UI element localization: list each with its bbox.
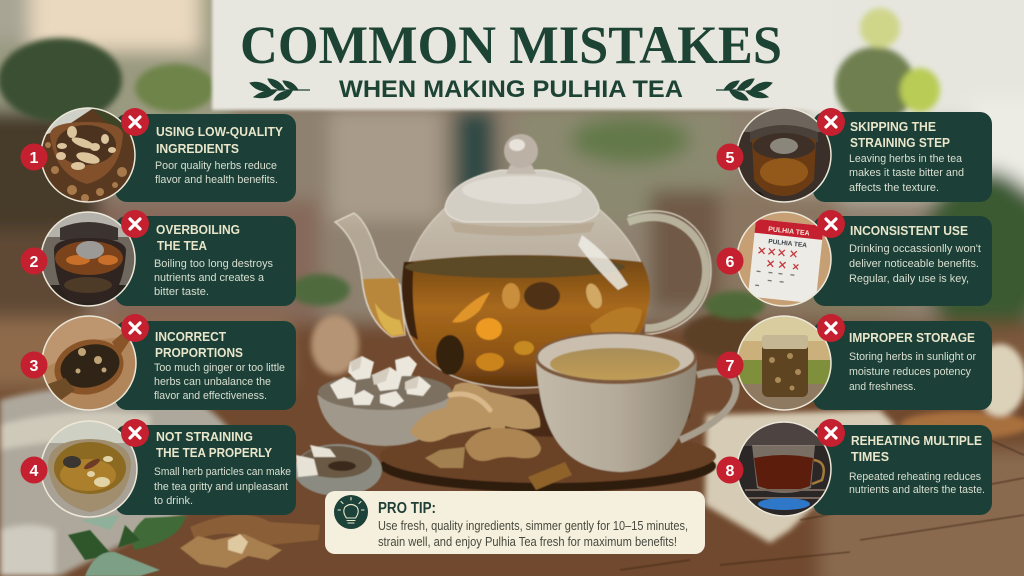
number 5 bbox=[716, 144, 744, 170]
teapot glass body bbox=[403, 208, 648, 388]
panel 5 bbox=[813, 112, 992, 202]
photo border bbox=[41, 108, 135, 202]
panel 8 bbox=[813, 425, 992, 515]
photo: glass cup of tea on a gas flame bbox=[737, 422, 831, 516]
panel 7: moisture reduces potency bbox=[849, 366, 972, 378]
pro tip body: strain well, and enjoy Pulhia Tea fresh for maximum benefits! bbox=[378, 535, 677, 549]
mistake 7: improper storage bbox=[716, 314, 992, 410]
X badge bbox=[121, 108, 149, 136]
tea liquid bbox=[402, 255, 650, 387]
X badge bbox=[121, 419, 149, 447]
panel 4: THE TEA PROPERLY bbox=[156, 445, 272, 460]
pro tip heading: PRO TIP: bbox=[378, 500, 436, 517]
panel 5: SKIPPING THE bbox=[850, 119, 936, 134]
bottom herbs and leaves bbox=[68, 515, 320, 576]
subtitle: WHEN MAKING PULHIA TEA bbox=[339, 76, 683, 103]
number 1 bbox=[20, 144, 48, 170]
number 6 bbox=[716, 248, 744, 274]
white lump bowl bbox=[317, 356, 452, 446]
panel 4 bbox=[115, 425, 296, 515]
photo: marked calendar: PULHIA TEA bbox=[768, 238, 808, 249]
number 3: 3 bbox=[30, 358, 39, 375]
X badge bbox=[817, 108, 845, 136]
pro tip body bbox=[378, 519, 688, 549]
panel 1 bbox=[115, 114, 296, 202]
panel 4: the tea gritty and unpleasant bbox=[154, 481, 288, 493]
panel 8: REHEATING MULTIPLE bbox=[851, 433, 982, 448]
photo: cup of tea with herb particles bbox=[47, 422, 136, 512]
panel 3: herbs can unbalance the bbox=[154, 376, 271, 388]
photo: marked calendar bbox=[737, 212, 831, 306]
number 7 bbox=[716, 352, 744, 378]
panel 4: Small herb particles can make bbox=[154, 466, 291, 478]
panel 4: to drink. bbox=[154, 495, 193, 507]
photo border bbox=[737, 108, 831, 202]
title backdrop band bbox=[212, 0, 832, 110]
number 8: 8 bbox=[726, 463, 735, 480]
teapot spout bbox=[335, 213, 405, 337]
photo: glass jar of herbs bbox=[737, 316, 831, 410]
number 2: 2 bbox=[30, 254, 39, 271]
photo: herbs in a wooden bowl bbox=[40, 107, 136, 203]
panel 2: OVERBOILING bbox=[156, 222, 240, 237]
panel 5: affects the texture. bbox=[849, 182, 939, 194]
photo: boiling pot bbox=[40, 211, 136, 307]
number 7: 7 bbox=[726, 358, 735, 375]
photo border bbox=[41, 421, 137, 517]
ginger root bbox=[410, 383, 572, 490]
panel 3: INCORRECT bbox=[155, 329, 226, 344]
panel 6: Drinking occassionlly won't bbox=[849, 243, 981, 255]
panel 7: IMPROPER STORAGE bbox=[849, 330, 975, 345]
central still life: teapot, cup, ginger and bowls bbox=[294, 134, 736, 496]
number 1: 1 bbox=[30, 150, 39, 167]
number 4: 4 bbox=[30, 463, 39, 480]
mistake 8: reheating multiple times bbox=[716, 419, 992, 516]
X badge bbox=[121, 314, 149, 342]
panel 3: Too much ginger or too little bbox=[154, 362, 285, 374]
title: COMMON MISTAKES bbox=[240, 15, 782, 75]
X badge bbox=[817, 419, 845, 447]
photo border bbox=[42, 316, 136, 410]
panel 5: STRAINING STEP bbox=[850, 135, 950, 150]
small plate of herbs bbox=[294, 444, 382, 496]
number 5: 5 bbox=[726, 150, 735, 167]
mistake 3: incorrect proportions bbox=[20, 314, 296, 411]
panel 2: THE TEA bbox=[157, 238, 208, 253]
panel 2: Boiling too long destroys bbox=[154, 258, 274, 270]
panel 6: INCONSISTENT USE bbox=[850, 223, 968, 238]
photo border bbox=[737, 316, 831, 410]
panel 3: PROPORTIONS bbox=[155, 345, 243, 360]
panel 5: Leaving herbs in the tea bbox=[849, 153, 962, 165]
photo: glass pot of dark tea on the stove bbox=[737, 108, 831, 202]
panel 6: deliver noticeable benefits. bbox=[849, 258, 979, 270]
panel 1: USING LOW-QUALITY bbox=[156, 124, 283, 139]
panel 1: INGREDIENTS bbox=[156, 141, 239, 156]
icon: right leaf sprig bbox=[716, 79, 772, 100]
panel 5: makes it taste bitter and bbox=[849, 167, 964, 179]
photo border bbox=[737, 422, 831, 516]
icon: light bulb bbox=[334, 495, 368, 529]
mistake 5: skipping the straining step bbox=[716, 108, 992, 202]
panel 3: flavor and effectiveness. bbox=[154, 390, 267, 402]
panel 7: and freshness. bbox=[849, 381, 916, 393]
panel 1: Poor quality herbs reduce bbox=[155, 160, 277, 172]
X badge bbox=[121, 210, 149, 238]
mistake 2: overboiling the tea bbox=[20, 210, 296, 307]
photo: wooden scoop of herbs bbox=[41, 315, 137, 411]
panel 2: bitter taste. bbox=[154, 286, 209, 298]
panel 7: Storing herbs in sunlight or bbox=[849, 351, 976, 363]
panel 7 bbox=[813, 321, 992, 410]
mistake 4: not straining the tea properly bbox=[20, 419, 296, 517]
icon: left leaf sprig bbox=[250, 79, 310, 100]
panel 3 bbox=[115, 321, 296, 410]
wooden serving board bbox=[380, 393, 716, 492]
number 4 bbox=[20, 456, 48, 484]
panel 4: NOT STRAINING bbox=[156, 429, 253, 444]
mistake 1: using low-quality ingredients bbox=[20, 107, 296, 203]
X badge bbox=[817, 314, 845, 342]
number 8 bbox=[716, 456, 744, 484]
teapot highlights bbox=[578, 235, 628, 290]
panel 2 bbox=[115, 216, 296, 306]
panel 2: nutrients and creates a bbox=[154, 272, 264, 284]
panel 8: TIMES bbox=[851, 449, 889, 464]
panel 1: flavor and health benefits. bbox=[155, 174, 278, 186]
photo: marked calendar: PULHIA TEA bbox=[768, 226, 810, 238]
panel 6 bbox=[813, 216, 992, 306]
panel 8: Repeated reheating reduces bbox=[849, 471, 982, 483]
photo border bbox=[41, 212, 135, 306]
number 6: 6 bbox=[726, 254, 735, 271]
number 2 bbox=[20, 248, 48, 274]
X badge bbox=[817, 210, 845, 238]
panel 8: nutrients and alters the taste. bbox=[849, 484, 985, 496]
pro tip box bbox=[325, 491, 705, 554]
teapot handle bbox=[628, 217, 706, 328]
teapot lid bbox=[445, 134, 599, 236]
photo border bbox=[737, 212, 831, 306]
number 3 bbox=[20, 352, 48, 378]
panel 6: Regular, daily use is key, bbox=[849, 273, 969, 285]
pro tip body: Use fresh, quality ingredients, simmer gently for 10–15 minutes, bbox=[378, 519, 688, 533]
ceramic cup bbox=[535, 332, 736, 472]
mistake 6: inconsistent use bbox=[716, 210, 992, 306]
